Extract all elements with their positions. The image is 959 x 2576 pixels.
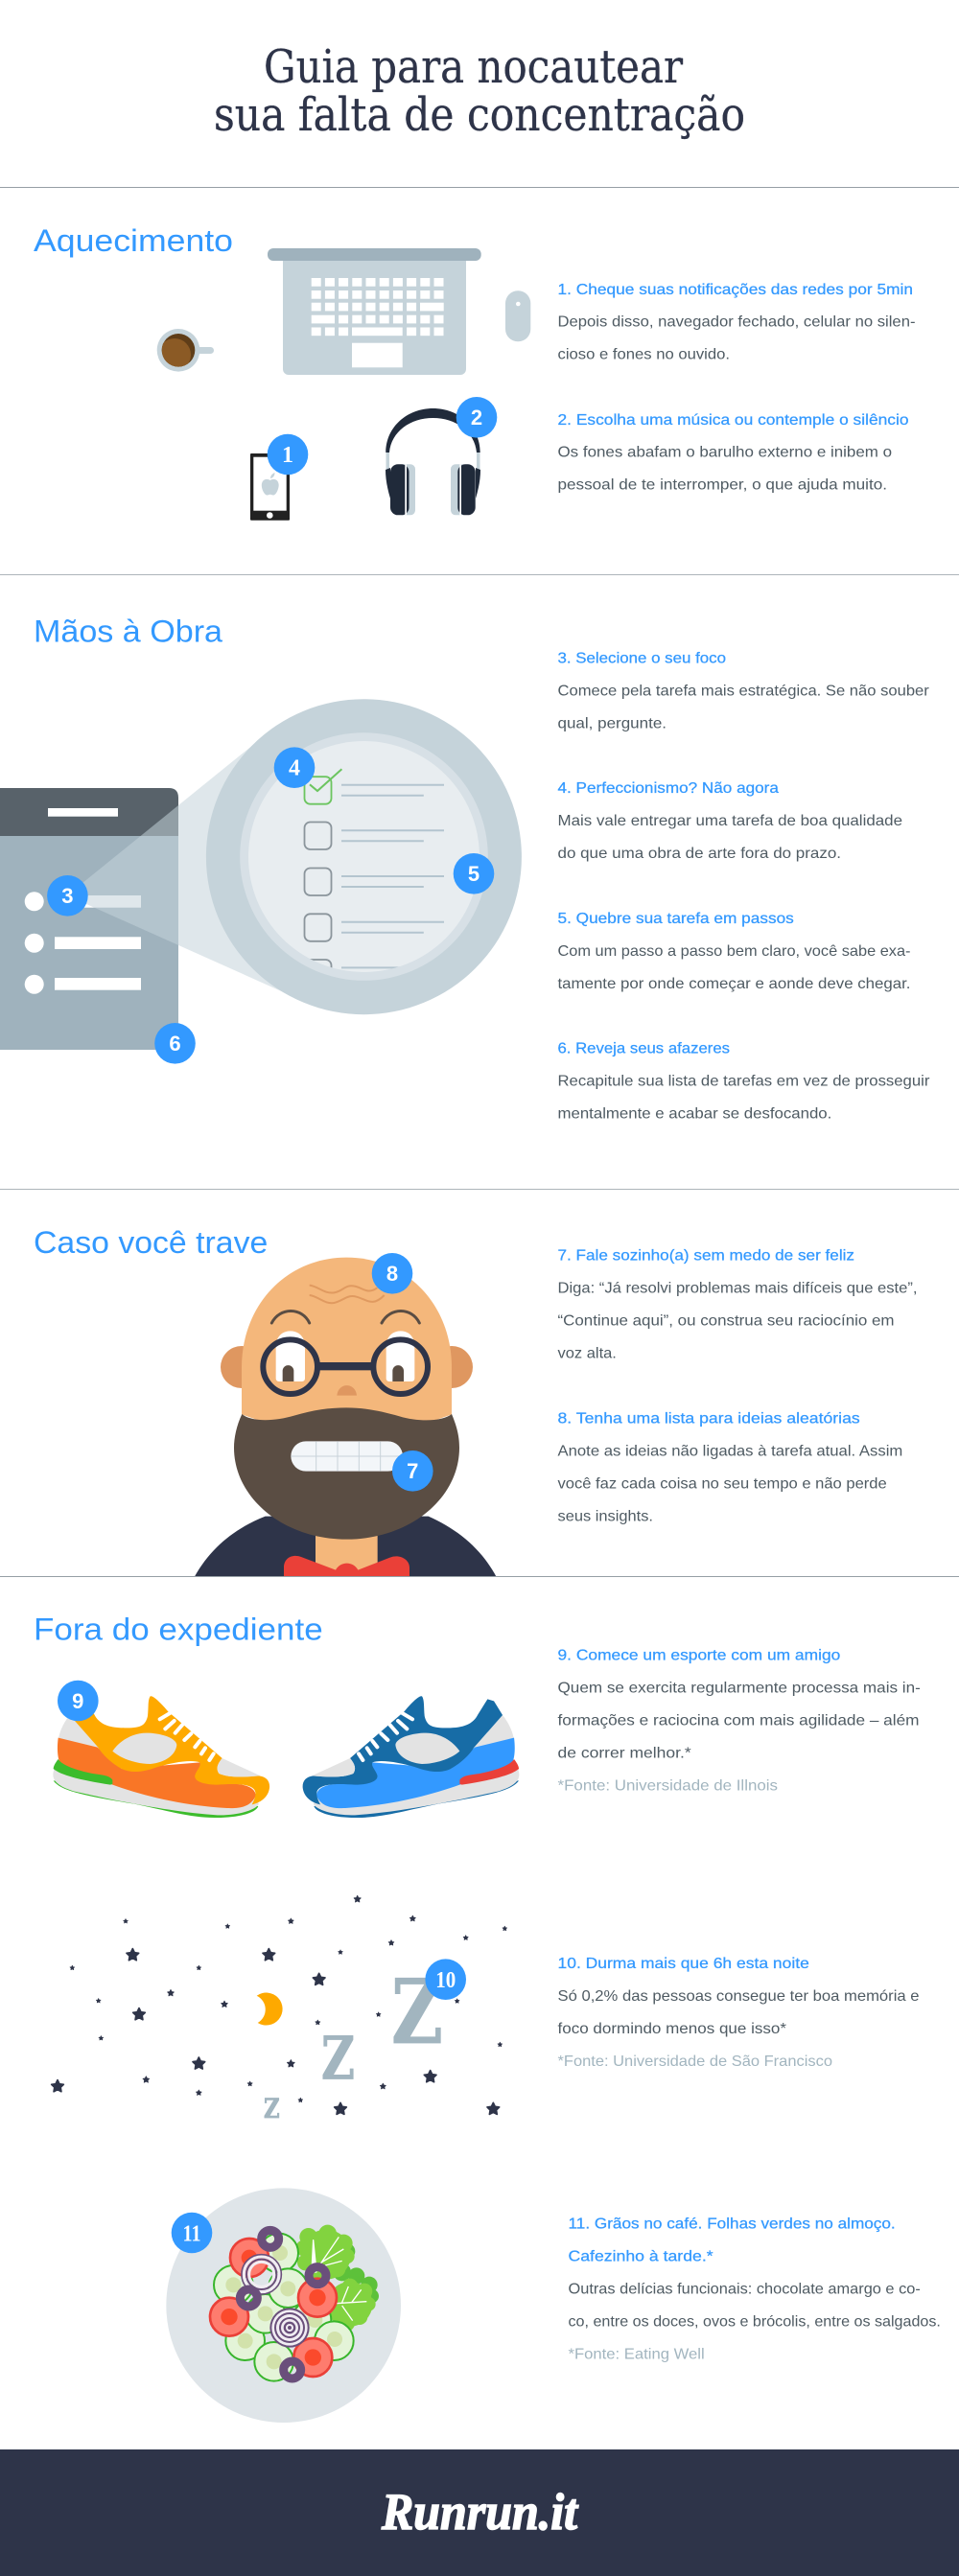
badge 5 xyxy=(454,853,494,894)
badge 3: 3 xyxy=(61,884,74,908)
tip 6 xyxy=(558,1040,930,1122)
tip 1: 1. Cheque suas notificações das redes por 5min xyxy=(558,282,913,298)
tip 4 xyxy=(558,780,902,862)
icon: mouse xyxy=(505,290,530,341)
icon: moon xyxy=(257,1993,283,2026)
tip 1 xyxy=(558,282,915,362)
badge 4: 4 xyxy=(289,755,300,780)
panel: maos a obra xyxy=(0,615,930,1122)
tip 2 xyxy=(558,412,909,493)
illustration: night sky with stars xyxy=(52,1895,507,2114)
tip 4: 4. Perfeccionismo? Não agora xyxy=(558,780,779,797)
tip 9: 9. Comece um esporte com um amigo xyxy=(558,1648,840,1664)
tip 10: foco dormindo menos que isso* xyxy=(558,2021,786,2037)
panel: aquecimento xyxy=(34,223,915,521)
tip 11: *Fonte: Eating Well xyxy=(568,2347,705,2363)
tip 7: “Continue aqui”, ou construa seu raciocínio em xyxy=(558,1313,894,1330)
icon: laptop xyxy=(268,248,481,375)
title: Guia para nocautear xyxy=(264,40,683,94)
tip 3: Comece pela tarefa mais estratégica. Se não souber xyxy=(558,684,929,700)
tip 1: Depois disso, navegador fechado, celular no silen- xyxy=(558,314,915,331)
badge 7 xyxy=(392,1450,433,1492)
olives xyxy=(240,2230,326,2379)
tip 6: 6. Reveja seus afazeres xyxy=(558,1040,730,1056)
tip 3: 3. Selecione o seu foco xyxy=(558,651,726,667)
tip 11 xyxy=(568,2216,941,2363)
tip 8: seus insights. xyxy=(558,1509,653,1525)
footer xyxy=(0,2449,959,2576)
tip 6: Recapitule sua lista de tarefas em vez de prosseguir xyxy=(558,1073,930,1089)
tip 9: Quem se exercita regularmente processa mais in- xyxy=(558,1681,921,1697)
tip 2: Os fones abafam o barulho externo e inibem o xyxy=(558,445,892,460)
tip 8: 8. Tenha uma lista para ideias aleatórias xyxy=(558,1411,860,1427)
tip 7: voz alta. xyxy=(558,1346,617,1362)
tip 10: Só 0,2% das pessoas consegue ter boa memória e xyxy=(558,1988,920,2005)
tip 11: co, entre os doces, ovos e brócolis, entre os salgados. xyxy=(568,2314,941,2331)
tip 7: Diga: “Já resolvi problemas mais difíceis que este”, xyxy=(558,1281,917,1297)
logo: Runrun.it xyxy=(381,2483,579,2541)
magnifier xyxy=(206,699,522,1014)
tip 6: mentalmente e acabar se desfocando. xyxy=(558,1105,831,1122)
tip 7: 7. Fale sozinho(a) sem medo de ser feliz xyxy=(558,1248,854,1265)
badge 9: 9 xyxy=(72,1689,83,1713)
badge 11 xyxy=(172,2213,212,2253)
letter z small: Z xyxy=(264,2093,280,2124)
badge 2 xyxy=(456,397,497,438)
tip 9: de correr melhor.* xyxy=(558,1746,691,1762)
tip 2: 2. Escolha uma música ou contemple o silêncio xyxy=(558,412,909,429)
tip 5 xyxy=(558,911,911,992)
tip 9: formações e raciocina com mais agilidade – além xyxy=(558,1713,919,1729)
panel: caso voce trave xyxy=(34,1225,917,1577)
badge 1 xyxy=(268,434,308,475)
task list card xyxy=(0,788,178,1050)
badge 8: 8 xyxy=(386,1262,398,1286)
badge 6: 6 xyxy=(169,1032,181,1056)
icon: phone xyxy=(250,453,290,521)
tip 2: pessoal de te interromper, o que ajuda muito. xyxy=(558,477,887,493)
tip 10: 10. Durma mais que 6h esta noite xyxy=(558,1956,809,1972)
tip 5: Com um passo a passo bem claro, você sabe exa- xyxy=(558,943,911,960)
tip 11: Cafezinho à tarde.* xyxy=(568,2249,713,2265)
tip 8: você faz cada coisa no seu tempo e não perde xyxy=(558,1476,887,1493)
badge 2: 2 xyxy=(471,406,482,429)
tip 4: do que uma obra de arte fora do prazo. xyxy=(558,846,841,862)
heading: maos a obra: Mãos à Obra xyxy=(34,615,222,649)
tip 8 xyxy=(558,1411,902,1525)
badge 3 xyxy=(47,875,88,917)
plate xyxy=(166,2188,401,2423)
icon: orange sneaker xyxy=(53,1696,269,1818)
letter z medium: Z xyxy=(321,2023,355,2093)
tip 11: 11. Grãos no café. Folhas verdes no almoço. xyxy=(568,2216,896,2233)
tip 7 xyxy=(558,1248,917,1362)
onion rings xyxy=(242,2255,310,2348)
tip 8: Anote as ideias não ligadas à tarefa atual. Assim xyxy=(558,1444,902,1460)
tip 5: tamente por onde começar e aonde deve chegar. xyxy=(558,976,911,992)
tip 9: *Fonte: Universidade de Illnois xyxy=(558,1778,778,1795)
tip 10 xyxy=(558,1956,920,2070)
badge 9 xyxy=(58,1681,99,1721)
tip 11: Outras delícias funcionais: chocolate amargo e co- xyxy=(568,2282,921,2298)
badge 11: 11 xyxy=(182,2222,201,2247)
panel: fora do expediente xyxy=(34,1613,941,2423)
tip 1: cioso e fones no ouvido. xyxy=(558,346,730,362)
cucumber slices xyxy=(214,2234,354,2381)
illustration: bald bearded man xyxy=(195,1258,497,1577)
heading: caso voce trave: Caso você trave xyxy=(34,1225,268,1260)
icon: blue sneaker xyxy=(303,1696,519,1818)
heading: aquecimento: Aquecimento xyxy=(34,223,233,258)
badge 4 xyxy=(274,747,315,788)
badge 1: 1 xyxy=(282,443,293,468)
lettuce leaves xyxy=(295,2225,379,2332)
tomato slices xyxy=(210,2239,337,2377)
badge 7: 7 xyxy=(407,1459,418,1483)
tip 4: Mais vale entregar uma tarefa de boa qualidade xyxy=(558,813,902,829)
badge 10: 10 xyxy=(435,1968,456,1993)
badge 5: 5 xyxy=(468,862,480,886)
tip 10: *Fonte: Universidade de São Francisco xyxy=(558,2054,832,2070)
badge 8 xyxy=(372,1253,412,1294)
tip 5: 5. Quebre sua tarefa em passos xyxy=(558,911,794,927)
badge 6 xyxy=(154,1023,196,1064)
icon: coffee cup xyxy=(157,329,214,372)
title: sua falta de concentração xyxy=(214,88,745,142)
illustration: salad plate xyxy=(166,2188,401,2423)
letter z large: Z xyxy=(391,1960,443,2064)
tip 3 xyxy=(558,651,929,732)
title xyxy=(214,40,745,142)
magnifier beam xyxy=(67,728,364,999)
icon: headphones xyxy=(386,408,480,515)
badge 10 xyxy=(425,1959,466,2000)
tip 9 xyxy=(558,1648,921,1795)
heading: fora do expediente: Fora do expediente xyxy=(34,1613,323,1647)
tip 3: qual, pergunte. xyxy=(558,716,667,732)
